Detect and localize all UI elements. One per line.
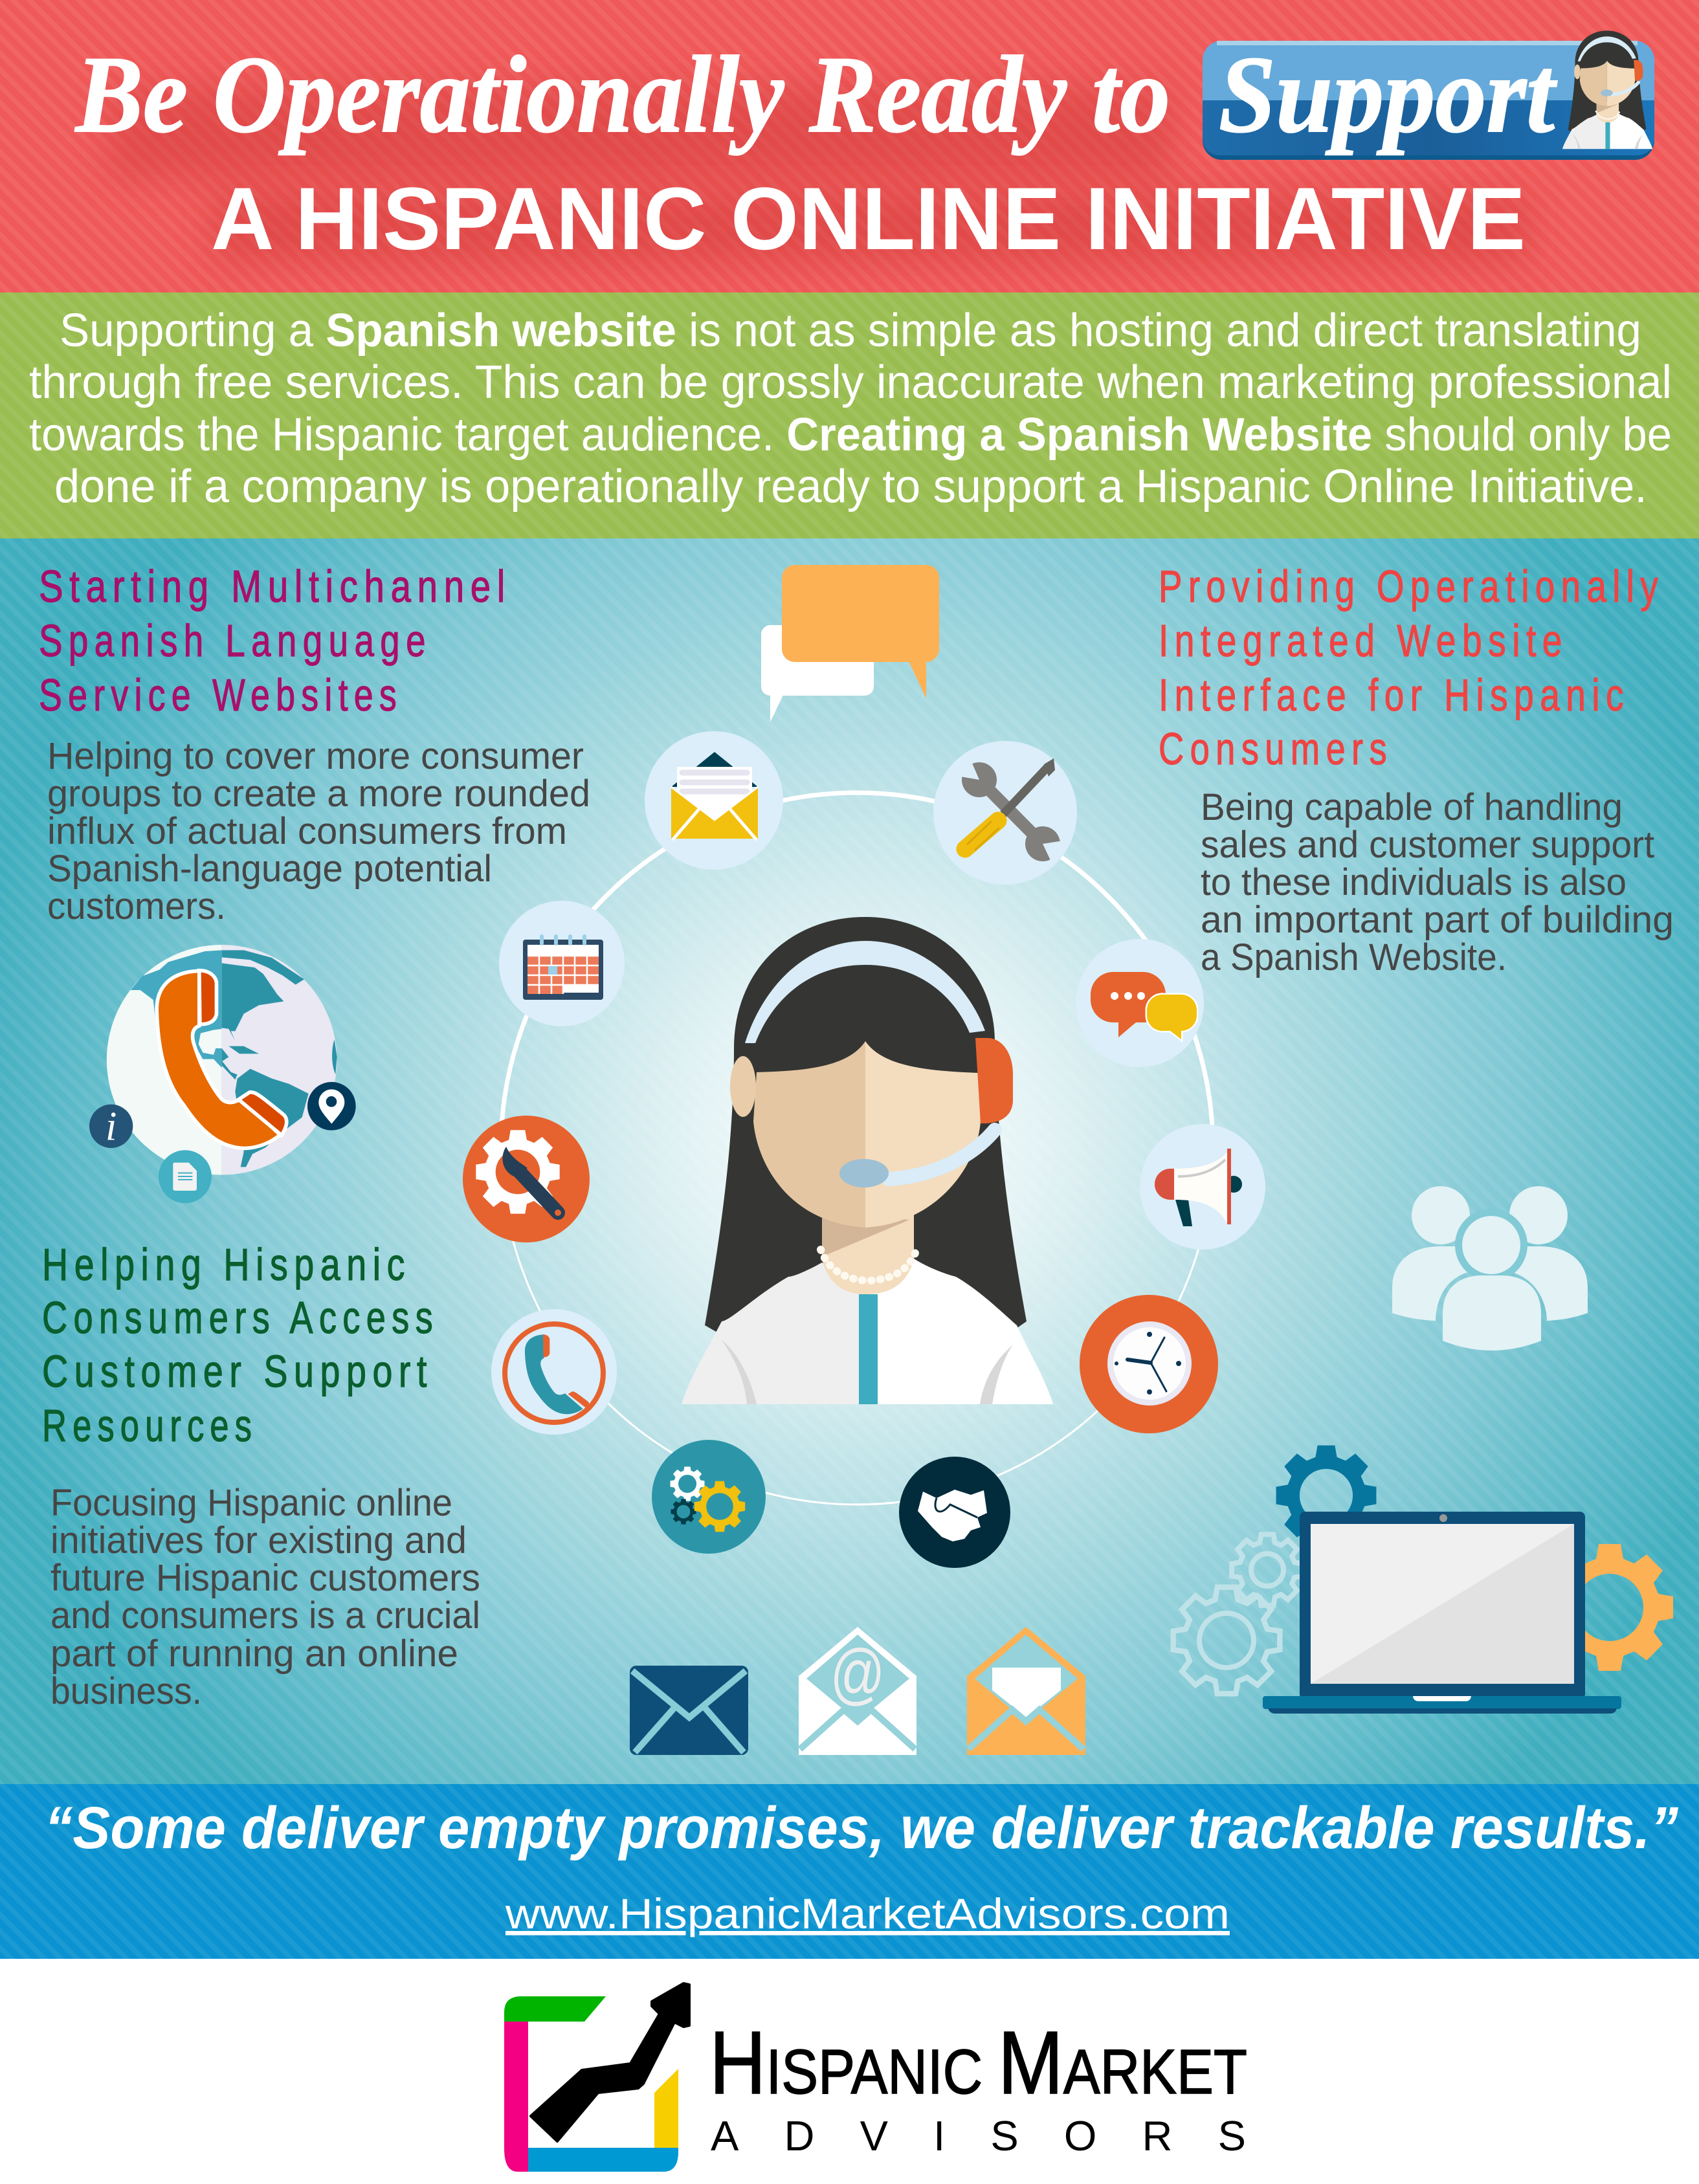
icon: gear and wrench [463, 1116, 590, 1242]
text block: integrated website [1201, 786, 1674, 978]
panel: green intro [0, 292, 1699, 538]
panel: white footer [0, 1959, 1699, 2184]
heading: customer support: Customer Support [42, 1346, 433, 1396]
icon: email at sign envelope: @ [830, 1636, 885, 1712]
logo wordmark: HISPANIC MARKET [709, 2013, 1247, 2113]
illustration: operator woman [682, 917, 1053, 1404]
text block: multichannel: Spanish-language potential [47, 848, 492, 890]
text block: integrated website: Being capable of handling [1201, 786, 1623, 828]
heading: multichannel: Service Websites [39, 670, 403, 720]
icon: chat bubbles [1076, 939, 1204, 1067]
heading: customer support: Resources [42, 1400, 258, 1451]
heading: multichannel [39, 561, 511, 720]
icon: megaphone [1140, 1124, 1265, 1250]
text block: customer support: and consumers is a crucial [50, 1594, 480, 1637]
text block: customer support: initiatives for existing and [50, 1519, 467, 1561]
text block: multichannel: Helping to cover more consumer [47, 735, 584, 777]
panel: red header [0, 0, 1699, 292]
icon: calendar [499, 901, 625, 1026]
text block: multichannel: customers. [47, 885, 226, 927]
logo mark [504, 1983, 689, 2172]
heading: customer support [42, 1239, 439, 1451]
logo: hispanic market advisors [504, 1983, 1247, 2172]
icon: wrench and screwdriver [933, 741, 1077, 885]
intro paragraph: Supporting a Spanish website is not as simple as hosting and direct translating [60, 305, 1641, 357]
text block: multichannel: influx of actual consumers from [47, 810, 567, 852]
icon: speech bubbles [761, 565, 939, 722]
heading: integrated website: Consumers [1159, 723, 1393, 774]
text block: customer support: business. [50, 1670, 202, 1712]
panel: blue quote band [0, 1784, 1699, 1959]
icon: phone [491, 1309, 617, 1435]
heading: integrated website [1159, 561, 1664, 774]
icon: navy envelope [630, 1666, 748, 1755]
text block: integrated website: to these individuals is also [1201, 861, 1627, 903]
icon: laptop with gears [1173, 1446, 1673, 1714]
intro paragraph: through free services. This can be grossly inaccurate when marketing professional [29, 357, 1672, 408]
heading: integrated website: Integrated Website [1159, 615, 1568, 666]
icon: globe with phone [89, 945, 356, 1203]
panel: teal main background [0, 538, 1699, 1784]
website link: www.HispanicMarketAdvisors.com [505, 1890, 1230, 1937]
text block: customer support: Focusing Hispanic online [50, 1482, 452, 1524]
icon: people group [1392, 1186, 1588, 1351]
heading: multichannel: Spanish Language [39, 615, 432, 666]
intro paragraph: towards the Hispanic target audience. Creating a Spanish Website should only be [29, 409, 1672, 461]
title line 2: A HISPANIC ONLINE INITIATIVE [211, 170, 1526, 269]
icon: handshake [899, 1457, 1010, 1568]
button: support badge: Support [1219, 34, 1557, 155]
text block: integrated website: a Spanish Website. [1201, 936, 1507, 978]
heading: customer support: Consumers Access [42, 1292, 439, 1343]
text block: integrated website: sales and customer support [1201, 824, 1654, 866]
title line 1: Be Operationally Ready to [74, 34, 1170, 155]
intro paragraph: done if a company is operationally ready to support a Hispanic Online Initiative. [54, 461, 1647, 513]
text block: customer support: part of running an online [50, 1633, 458, 1675]
icon: clock [1080, 1295, 1218, 1433]
text block: customer support [50, 1482, 480, 1712]
text block: multichannel [47, 735, 590, 927]
text block: integrated website: an important part of building [1201, 899, 1674, 941]
icon: globe with phone: i [105, 1104, 117, 1149]
logo subtitle: ADVISORS [711, 2112, 1246, 2159]
icon: email at sign envelope [799, 1627, 916, 1755]
heading: customer support: Helping Hispanic [42, 1239, 411, 1290]
icon: open envelope [645, 731, 783, 870]
heading: multichannel: Starting Multichannel [39, 561, 511, 612]
ring: connecting circle [501, 793, 1213, 1505]
icon: cogs [652, 1440, 766, 1554]
text block: multichannel: groups to create a more rounded [47, 773, 590, 815]
text block: customer support: future Hispanic customers [50, 1557, 480, 1599]
intro paragraph [29, 305, 1672, 513]
icon: orange envelope [967, 1627, 1085, 1755]
